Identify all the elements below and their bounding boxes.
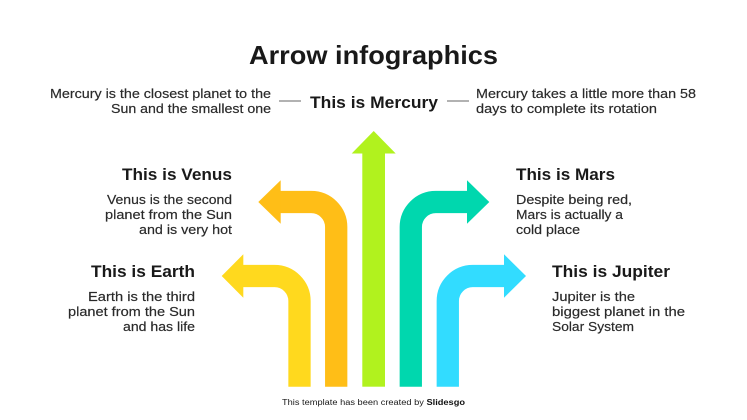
heading: Mercury: This is Mercury (310, 93, 439, 112)
text block: Earth description: planet from the Sun (68, 304, 195, 319)
text block: Venus description: and is very hot (139, 222, 232, 237)
text block: Mars description: Despite being red, (516, 192, 632, 207)
title: Arrow infographics (249, 40, 498, 70)
text block: Jupiter description (552, 289, 685, 334)
arrow: Earth, yellow, turning left (222, 254, 300, 387)
arrow: Venus, orange, turning left (258, 180, 336, 387)
text block: Mercury left description: Mercury is the closest planet to the (50, 86, 271, 101)
text block: Mars description: cold place (516, 222, 580, 237)
text block: Mercury right description (476, 86, 696, 116)
panel: Jupiter (552, 262, 685, 334)
footer credit: This template has been created by Slidesgo (282, 398, 465, 407)
panel: Mars (516, 165, 632, 237)
text block: Earth description: and has life (123, 319, 195, 334)
text block: Mars description (516, 192, 632, 237)
text block: Venus description (105, 192, 232, 237)
text block: Earth description (68, 289, 195, 334)
text block: Jupiter description: Solar System (552, 319, 634, 334)
arrow: Mars, teal, turning right (411, 180, 489, 387)
text block: Mars description: Mars is actually a (516, 207, 624, 222)
text block: Venus description: planet from the Sun (105, 207, 232, 222)
connector: right (447, 100, 469, 102)
panel: Venus (105, 165, 232, 237)
text block: Mercury right description: days to complete its rotation (476, 101, 657, 116)
panel: Earth (68, 262, 195, 334)
text block: Mercury left description (50, 86, 271, 116)
heading: Venus: This is Venus (122, 165, 232, 184)
text block: Earth description: Earth is the third (88, 289, 195, 304)
arrow: Jupiter, cyan, turning right (448, 254, 526, 387)
text block: Mercury right description: Mercury takes a little more than 58 (476, 86, 696, 101)
text block: Jupiter description: biggest planet in the (552, 304, 685, 319)
heading: Jupiter: This is Jupiter (552, 262, 670, 281)
arrow: Mercury, lime, pointing up (352, 131, 396, 387)
heading: Earth: This is Earth (91, 262, 195, 281)
heading: Mars: This is Mars (516, 165, 615, 184)
text block: Mercury left description: Sun and the smallest one (111, 101, 271, 116)
connector: left (279, 100, 301, 102)
text block: Venus description: Venus is the second (107, 192, 232, 207)
text block: Jupiter description: Jupiter is the (552, 289, 635, 304)
panel: Mercury (50, 86, 696, 116)
